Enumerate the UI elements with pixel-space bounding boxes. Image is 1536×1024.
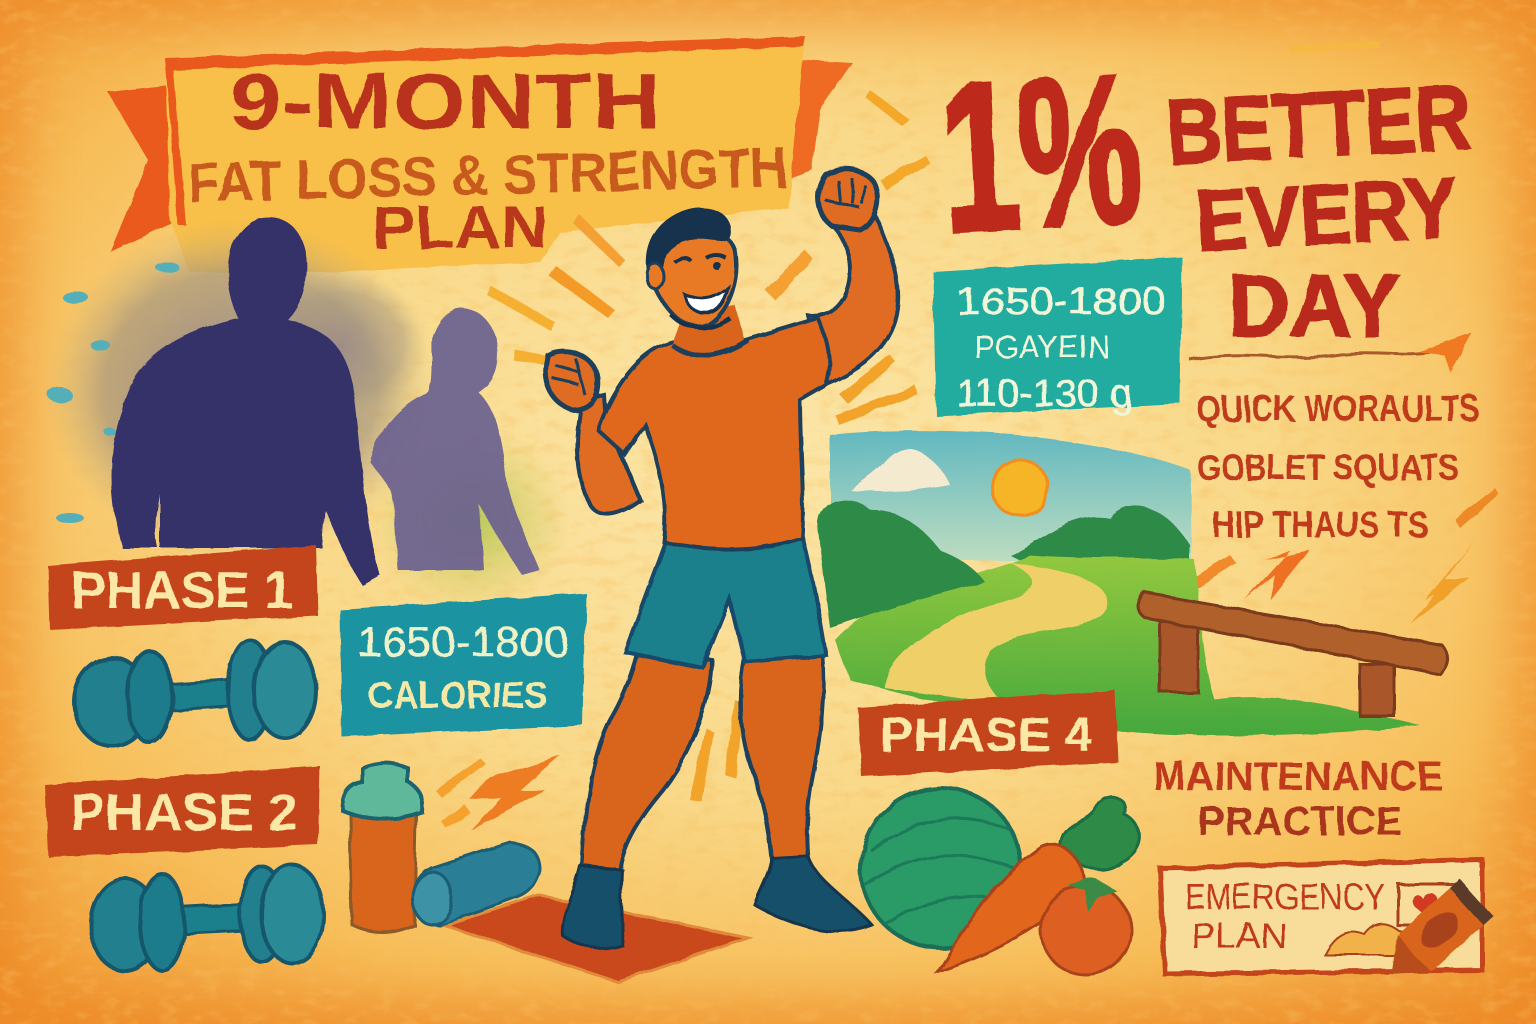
- workout item 1: GOBLET SQUATS: [1197, 447, 1459, 488]
- maintenance practice text: PRACTICE: [1198, 798, 1402, 844]
- smoke wash: [45, 220, 435, 560]
- torso shirt: [598, 318, 829, 549]
- leg right: [740, 650, 823, 860]
- underline arrow: [1190, 350, 1440, 360]
- calories box: [340, 593, 586, 737]
- phase 1 label: [48, 545, 318, 630]
- phase 1 label: PHASE 1: [71, 562, 293, 620]
- shorts: [625, 528, 826, 668]
- headline: 1% better every day: [935, 29, 1473, 372]
- energy strokes: [435, 42, 1499, 830]
- maintenance practice text: [1153, 753, 1443, 844]
- icon: crayon: [1375, 879, 1493, 992]
- carrot: [938, 844, 1085, 972]
- big 1 percent: 1%: [935, 29, 1147, 276]
- phase 4 label: PHASE 4: [880, 709, 1092, 762]
- icon: dumbbell 2: [91, 865, 323, 971]
- phase 4 label: [858, 690, 1118, 777]
- workouts heading: QUICK WORAULTS: [1196, 388, 1480, 429]
- shoe left: [562, 866, 623, 948]
- snacks: [1325, 924, 1425, 955]
- shirt collar: [672, 340, 748, 355]
- day: DAY: [1228, 256, 1400, 355]
- hair: [646, 207, 731, 285]
- green field: [835, 555, 1420, 735]
- icon: rolled towel: [412, 842, 540, 925]
- raised right arm: [808, 215, 898, 385]
- fist left: [546, 351, 598, 410]
- silhouettes: before figures: [45, 217, 570, 615]
- ear: [647, 263, 663, 289]
- title line 1: 9-MONTH: [229, 57, 661, 145]
- phase 2 label: [45, 766, 320, 857]
- far trees right: [1010, 506, 1190, 575]
- every: EVERY: [1193, 160, 1460, 270]
- title banner: [108, 36, 853, 272]
- protein box: [933, 257, 1182, 416]
- wooden bench: [1138, 593, 1448, 716]
- title line 2: FAT LOSS & STRENGTH: [187, 135, 788, 214]
- box line 3: 110-130 g: [956, 373, 1132, 415]
- small silhouette: [370, 308, 540, 575]
- banner left ribbon tail: [108, 85, 190, 252]
- shoe right: [755, 856, 872, 932]
- icon: dumbbell 1: [74, 640, 316, 746]
- banner right ribbon tail: [785, 60, 853, 180]
- sun: [992, 460, 1048, 516]
- tomato: [1041, 885, 1131, 975]
- icon: stability ball: [861, 788, 1021, 948]
- calories number: 1650-1800: [357, 618, 569, 665]
- large silhouette: [112, 217, 380, 585]
- head: [652, 229, 736, 327]
- landscape scene: [818, 431, 1420, 735]
- face: [674, 255, 726, 262]
- cloud: [850, 449, 950, 492]
- phase 2 label: PHASE 2: [70, 784, 298, 842]
- workouts list: [1196, 388, 1480, 545]
- emergency plan card: [1160, 860, 1482, 974]
- icon: shaker bottle: [342, 763, 422, 932]
- winding path: [885, 562, 1108, 705]
- card title line 1: EMERGENCY: [1185, 876, 1385, 917]
- fist right: [819, 169, 877, 230]
- card title line 2: PLAN: [1191, 915, 1287, 956]
- icon: carrot and vegetables: [938, 797, 1139, 975]
- maintenance practice text: MAINTENANCE: [1153, 753, 1443, 799]
- calories word: CALORIES: [368, 675, 548, 717]
- neck: [672, 305, 744, 354]
- man figure: [546, 169, 898, 948]
- box line 1: 1650-1800: [956, 281, 1166, 323]
- box line 2: PGAYEIN: [974, 329, 1110, 365]
- leg left: [582, 650, 712, 870]
- far trees left: [818, 499, 985, 628]
- leaves: [1060, 797, 1139, 869]
- title line 3: PLAN: [372, 194, 548, 261]
- better: BETTER: [1164, 66, 1473, 184]
- sky: [830, 431, 1192, 560]
- banner body: [165, 36, 805, 272]
- exercise mat: [445, 895, 748, 982]
- left arm: [577, 395, 640, 514]
- teal paint flecks: [48, 263, 180, 523]
- small card heart: [1398, 884, 1458, 926]
- workout item 2: HIP THAUS TS: [1212, 504, 1428, 545]
